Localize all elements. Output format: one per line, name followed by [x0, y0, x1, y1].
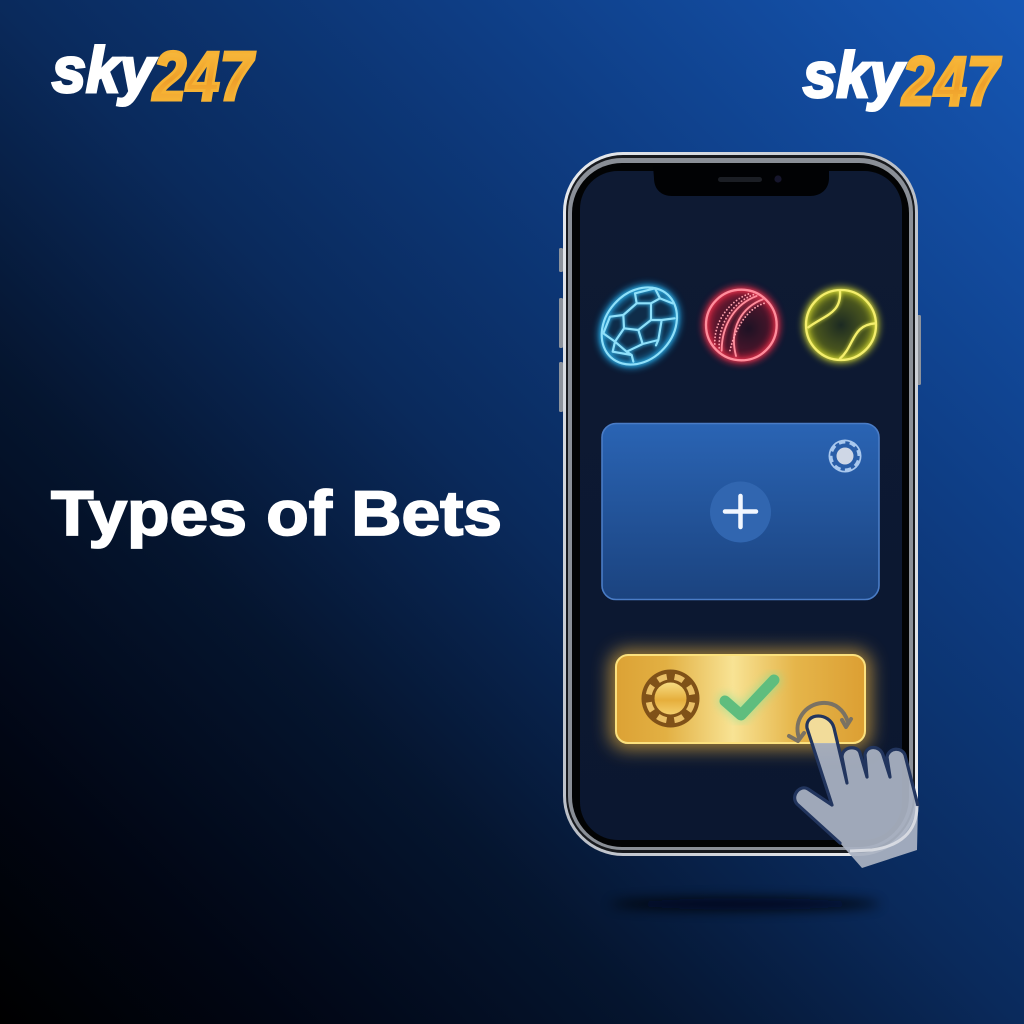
title: Types of Bets	[51, 479, 502, 549]
logo: right	[803, 39, 1002, 120]
notch	[653, 166, 829, 196]
logo: left: 247	[151, 37, 256, 115]
phone	[559, 152, 921, 856]
logo: right: 247	[900, 42, 1002, 120]
icon: tennis ball	[806, 290, 876, 360]
logo: right: sky	[803, 39, 906, 111]
icon: small chip	[828, 440, 862, 472]
hand outline	[795, 716, 918, 843]
phone frame	[563, 152, 918, 856]
side buttons	[559, 248, 921, 412]
logo: left: sky	[52, 34, 157, 106]
hand fill	[795, 716, 918, 868]
icon: cricket ball	[706, 290, 777, 360]
icon: green check	[725, 680, 774, 715]
fingertip highlight	[807, 716, 838, 743]
icon: football	[586, 272, 692, 380]
icon: plus button	[710, 482, 771, 542]
logo: left	[52, 34, 256, 115]
panel: gold confirm button	[610, 650, 871, 749]
icon: gold chip	[642, 670, 700, 728]
frame seen through hand	[850, 806, 917, 851]
icon: tapping hand	[789, 703, 918, 868]
phone shadow	[610, 898, 880, 910]
rotation arrows	[789, 703, 851, 741]
panel: bet slip card	[602, 424, 879, 600]
phone screen	[580, 171, 902, 840]
